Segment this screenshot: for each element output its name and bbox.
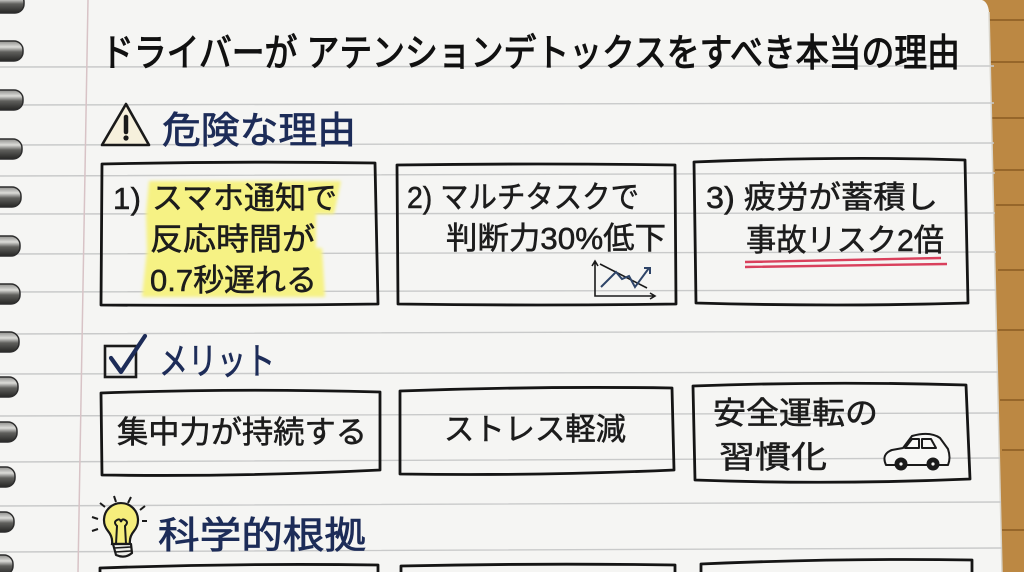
- card: evidence 2 (cut off): [401, 564, 675, 572]
- card: merit 3: 習慣化: [719, 440, 827, 475]
- card: merit 2: ストレス軽減: [444, 412, 626, 447]
- card: merit 2: [400, 387, 674, 474]
- icon: check box: [105, 336, 145, 377]
- card: reason 3: 3) 疲労が蓄積し: [706, 180, 938, 215]
- section: merits: [101, 336, 970, 482]
- card: reason 3: [694, 158, 968, 305]
- card: merit 3: [693, 383, 970, 482]
- card: merit 1: [101, 390, 380, 475]
- card: reason 2: 2) マルチタスクで: [407, 180, 639, 215]
- heading: scientific evidence: 科学的根拠: [158, 515, 366, 556]
- spiral binding rings: [0, 0, 24, 572]
- card: reason 1: 1): [113, 181, 141, 216]
- icon: warning triangle: [102, 104, 149, 145]
- card: reason 2: 判断力30%低下: [446, 221, 666, 256]
- heading: danger reasons: 危険な理由: [162, 110, 356, 151]
- red double underline: [745, 258, 947, 267]
- heading: merits: メリット: [159, 341, 275, 382]
- section: scientific evidence: [92, 496, 972, 572]
- icon: light bulb: [92, 496, 147, 557]
- card: merit 1: 集中力が持続する: [117, 415, 367, 450]
- card: reason 1: [101, 162, 378, 305]
- icon: line chart: [592, 261, 655, 299]
- card: evidence 1 (cut off): [100, 564, 378, 572]
- card: reason 1: 反応時間が: [150, 222, 315, 257]
- card: reason 3: 事故リスク2倍: [746, 223, 944, 258]
- card: merit 3: 安全運転の: [713, 396, 878, 431]
- section: danger reasons: [101, 104, 968, 305]
- card: reason 2: [397, 164, 676, 305]
- card: evidence 3 (cut off): [701, 560, 972, 572]
- card: reason 1: 0.7秒遅れる: [150, 263, 317, 298]
- yellow highlight: [142, 181, 341, 297]
- icon: car: [884, 434, 950, 470]
- card: reason 1: スマホ通知で: [152, 181, 337, 216]
